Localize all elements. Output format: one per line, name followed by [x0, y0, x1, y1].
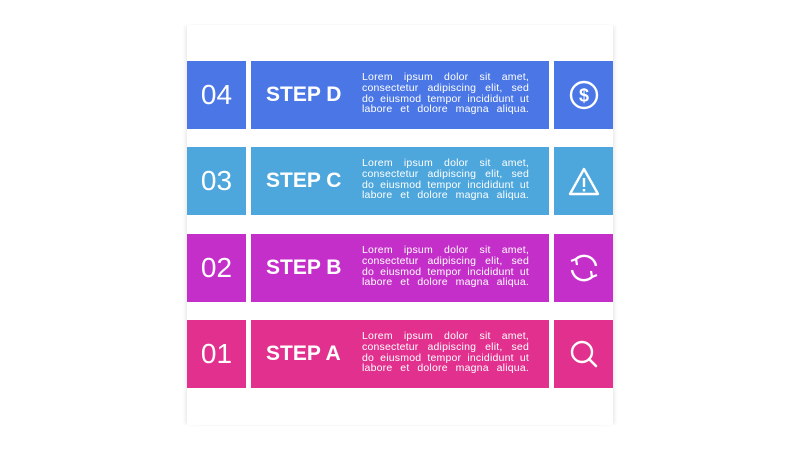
number 01: [187, 320, 246, 388]
background panel: [187, 25, 613, 425]
step D box: STEP D: [266, 83, 341, 106]
icon: warning: [554, 147, 613, 215]
step D box: Lorem ipsum dolor sit amet,: [362, 71, 529, 83]
step C box: do eiusmod tempor incididunt ut: [362, 179, 529, 191]
icon: search: [554, 320, 613, 388]
icon: dollar: [554, 61, 613, 129]
number 04: [187, 61, 246, 129]
row: step B: [187, 234, 613, 302]
step A box: Lorem ipsum dolor sit amet,: [362, 330, 529, 342]
step D box: labore et dolore magna aliqua.: [362, 103, 529, 115]
step B box: [251, 234, 549, 302]
step C box: [251, 147, 549, 215]
number 02: 02: [201, 252, 232, 283]
step A box: do eiusmod tempor incididunt ut: [362, 352, 529, 364]
row: step D: [187, 61, 613, 129]
number 01: 01: [201, 338, 232, 369]
step B box: do eiusmod tempor incididunt ut: [362, 266, 529, 278]
number 04: 04: [201, 79, 232, 110]
step B box: labore et dolore magna aliqua.: [362, 276, 529, 288]
row: step C: [187, 147, 613, 215]
row: step A: [187, 320, 613, 388]
step B box: Lorem ipsum dolor sit amet,: [362, 244, 529, 256]
step D box: do eiusmod tempor incididunt ut: [362, 93, 529, 105]
step B box: STEP B: [266, 256, 341, 279]
step C box: STEP C: [266, 169, 341, 192]
icon: dollar: $: [579, 86, 589, 106]
icon: refresh: [554, 234, 613, 302]
number 03: [187, 147, 246, 215]
step A box: [251, 320, 549, 388]
step C box: consectetur adipiscing elit, sed: [362, 168, 529, 180]
step A box: labore et dolore magna aliqua.: [362, 362, 529, 374]
number 03: 03: [201, 165, 232, 196]
step C box: labore et dolore magna aliqua.: [362, 189, 529, 201]
step B box: consectetur adipiscing elit, sed: [362, 255, 529, 267]
number 02: [187, 234, 246, 302]
step A box: STEP A: [266, 342, 341, 365]
step A box: consectetur adipiscing elit, sed: [362, 341, 529, 353]
step C box: Lorem ipsum dolor sit amet,: [362, 157, 529, 169]
step D box: consectetur adipiscing elit, sed: [362, 82, 529, 94]
step D box: [251, 61, 549, 129]
